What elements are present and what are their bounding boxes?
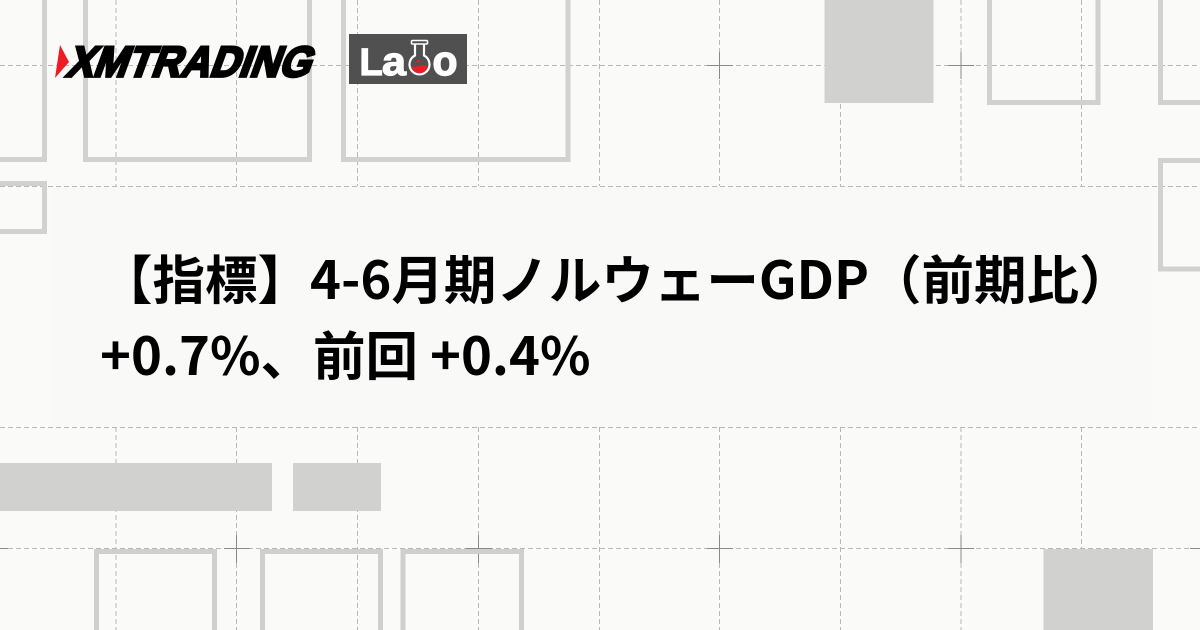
frames: bottom [96,552,522,630]
logo text: La [360,40,407,84]
logo text: o: o [432,37,458,84]
logo: Lab [349,34,467,84]
title: 【指標】4-6月期ノルウェーGDP（前期比） [100,239,1132,315]
icon: flask [410,40,430,74]
panel: title background [52,187,1152,427]
logo: XMTRADING: XMTRADING [61,39,323,86]
filled bar: bottom left long [0,463,272,511]
title [100,239,1132,391]
icon: red triangle [55,45,69,78]
filled block: bottom right [1044,549,1153,630]
title: +0.7%、前回 +0.4% [100,315,591,391]
frames: top right [990,0,1200,269]
filled bar: bottom left short [293,463,381,511]
filled block: top right [824,0,934,103]
logo text: La: a [382,40,407,84]
frames: top left [0,0,568,232]
logo text: La: L [360,42,383,84]
